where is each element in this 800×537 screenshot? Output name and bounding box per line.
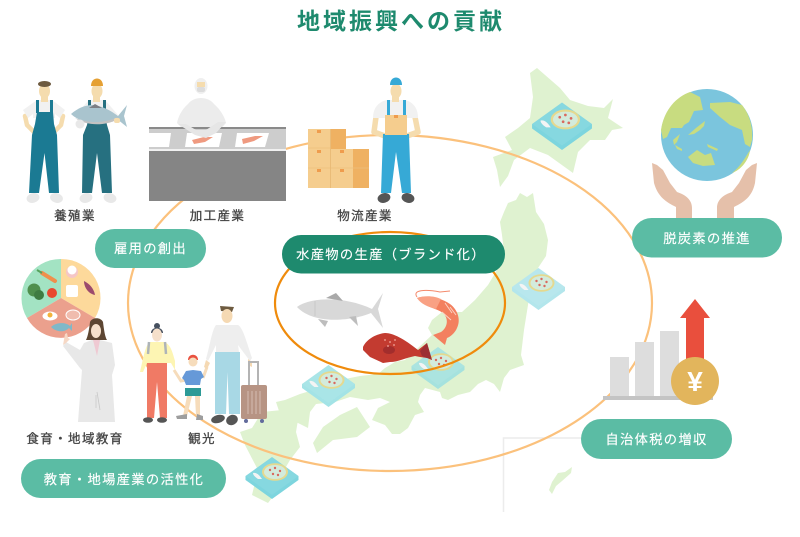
processing worker and line (149, 78, 286, 201)
icon: tuna held by worker (71, 104, 127, 127)
aquaculture tile: Chubu (412, 347, 464, 389)
worker: aquaculture 2 with tuna (71, 78, 127, 204)
conveyor back edge (149, 127, 286, 129)
icon: red snapper (363, 333, 432, 363)
label: tourism: 観光 (188, 432, 216, 446)
pill: job creation: 雇用の創出 (114, 241, 187, 256)
pill: tax revenue: 自治体税の増収 (605, 432, 708, 447)
icon: shrimp (416, 290, 459, 345)
child (174, 355, 207, 420)
label: processing: 加工産業 (190, 208, 245, 223)
label: food education: 食育・地域教育 (26, 431, 124, 446)
icon: yen coin: ¥ (687, 366, 703, 397)
conveyor belt (149, 129, 286, 149)
icon: tuna (297, 293, 383, 328)
chart: bars and arrow (603, 299, 719, 405)
icon: hands holding globe (652, 163, 757, 218)
okinawa inset frame (504, 438, 583, 512)
worker: logistics (373, 78, 418, 204)
pill: tax revenue (581, 419, 732, 459)
icon: globe (661, 89, 753, 181)
pill: job creation (95, 229, 206, 268)
conveyor front (149, 149, 286, 151)
family of tourists (140, 306, 267, 427)
pill: seafood production: 水産物の生産（ブランド化） (296, 246, 486, 262)
label: aquaculture: 養殖業 (54, 208, 96, 223)
pill: education and local industry (21, 459, 226, 498)
icon: food plate (21, 259, 101, 338)
suitcase (241, 362, 267, 423)
doctor (63, 318, 115, 422)
aquaculture tile: Tohoku (512, 268, 565, 310)
worker: aquaculture 1 (23, 81, 65, 204)
pill: seafood production (282, 235, 505, 274)
pill: decarbonization: 脱炭素の推進 (663, 231, 751, 246)
mother (140, 323, 175, 423)
label: logistics: 物流産業 (337, 208, 393, 223)
title: 地域振興への貢献 (297, 8, 505, 34)
boxes (308, 129, 369, 188)
map of Japan (240, 68, 623, 503)
aquaculture tile: Kyushu (246, 457, 298, 499)
pill: education and local industry: 教育・地場産業の活性化 (44, 472, 204, 487)
outer orange ellipse (128, 135, 652, 471)
pill: decarbonization (632, 218, 782, 258)
aquaculture tile: Chugoku (302, 365, 355, 407)
aquaculture tile: Hokkaido (532, 103, 592, 150)
father (204, 306, 252, 427)
inner orange ellipse (275, 232, 505, 374)
